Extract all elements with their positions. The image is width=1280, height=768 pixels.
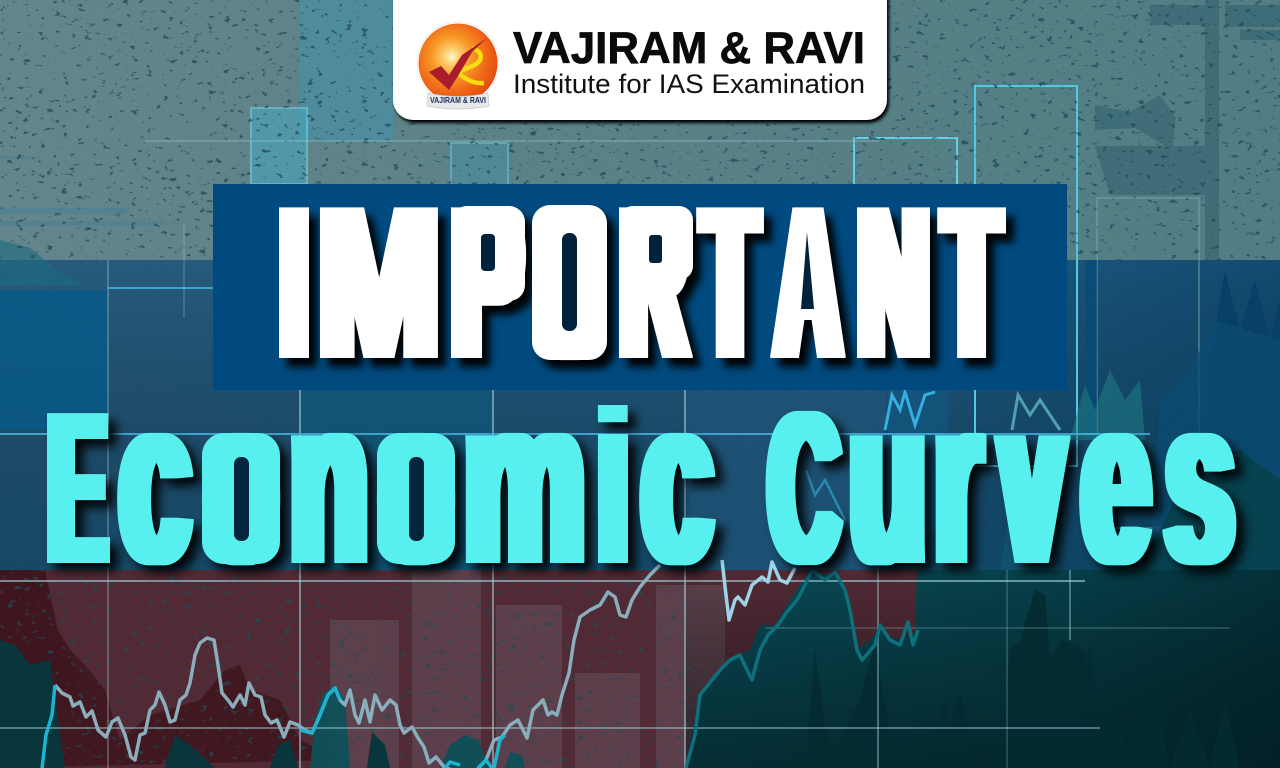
headline: Economic Curves: E xyxy=(49,367,105,608)
headline: Economic Curves: o xyxy=(205,348,277,613)
middle blue band xyxy=(0,260,1280,570)
headline: IMPORTANT: T xyxy=(703,161,757,403)
headline: IMPORTANT: M xyxy=(318,161,440,403)
headline: Economic Curves: m xyxy=(464,348,585,613)
headline: IMPORTANT: O xyxy=(536,161,602,403)
logo panel xyxy=(393,0,887,120)
headline: IMPORTANT: A xyxy=(776,161,840,403)
letter counters for IMPORTANT xyxy=(481,232,814,331)
dark teal right-hand area xyxy=(685,570,1280,768)
headline: IMPORTANT: R xyxy=(621,161,687,403)
headline: Economic Curves: C xyxy=(770,367,838,608)
headline: IMPORTANT: N xyxy=(858,161,928,403)
letter counters for Economic xyxy=(234,457,424,541)
headline: IMPORTANT: I xyxy=(280,161,308,403)
headline: Economic Curves: c xyxy=(120,348,190,613)
grid lines xyxy=(0,141,1230,768)
emblem red check mark xyxy=(429,38,487,90)
headline: Economic Curves: i xyxy=(599,379,627,547)
line chart: pale price curve xyxy=(55,565,660,768)
top textured band xyxy=(0,0,1280,260)
headline: Economic Curves: o xyxy=(380,348,452,613)
cyan line behind the title xyxy=(885,392,935,430)
line chart: bright cyan accents xyxy=(42,685,505,768)
headline: Economic Curves: r xyxy=(936,348,980,613)
dark red mountains xyxy=(0,570,340,768)
dark peaks in teal area xyxy=(805,590,1240,768)
headline: Economic Curves: v xyxy=(1001,348,1063,613)
headline: Economic Curves: c xyxy=(642,348,712,613)
headline: Economic Curves: n xyxy=(291,348,367,613)
teal peaks lower left xyxy=(0,640,390,768)
dark left column xyxy=(0,290,107,430)
emblem sun disc xyxy=(417,22,499,104)
brand name: VAJIRAM & RAVI xyxy=(513,24,865,73)
emblem yellow R swirl xyxy=(457,48,484,83)
headline: IMPORTANT: P xyxy=(452,161,522,403)
white rounded card xyxy=(393,0,887,120)
headline: IMPORTANT xyxy=(280,161,999,403)
dark smudges top right xyxy=(1095,0,1280,260)
middle band vertical panels xyxy=(300,390,493,570)
headline banner xyxy=(213,184,1067,390)
red lower band xyxy=(0,570,920,768)
translucent grey bars on the red band xyxy=(330,570,725,768)
brand tagline: Institute for IAS Examination xyxy=(513,69,865,99)
headline: Economic Curves: e xyxy=(1082,348,1149,613)
headline: Economic Curves xyxy=(49,348,1233,613)
logo emblem xyxy=(417,22,499,109)
text: T xyxy=(944,161,999,403)
logo emblem: VAJIRAM & RAVI xyxy=(430,96,486,105)
line chart: teal curve xyxy=(686,570,918,768)
headline: Economic Curves: u xyxy=(850,348,925,613)
texture speckles xyxy=(0,0,1280,260)
right dark peaks xyxy=(1200,270,1280,570)
emblem ribbon xyxy=(427,93,489,109)
upper translucent bars xyxy=(300,0,393,141)
